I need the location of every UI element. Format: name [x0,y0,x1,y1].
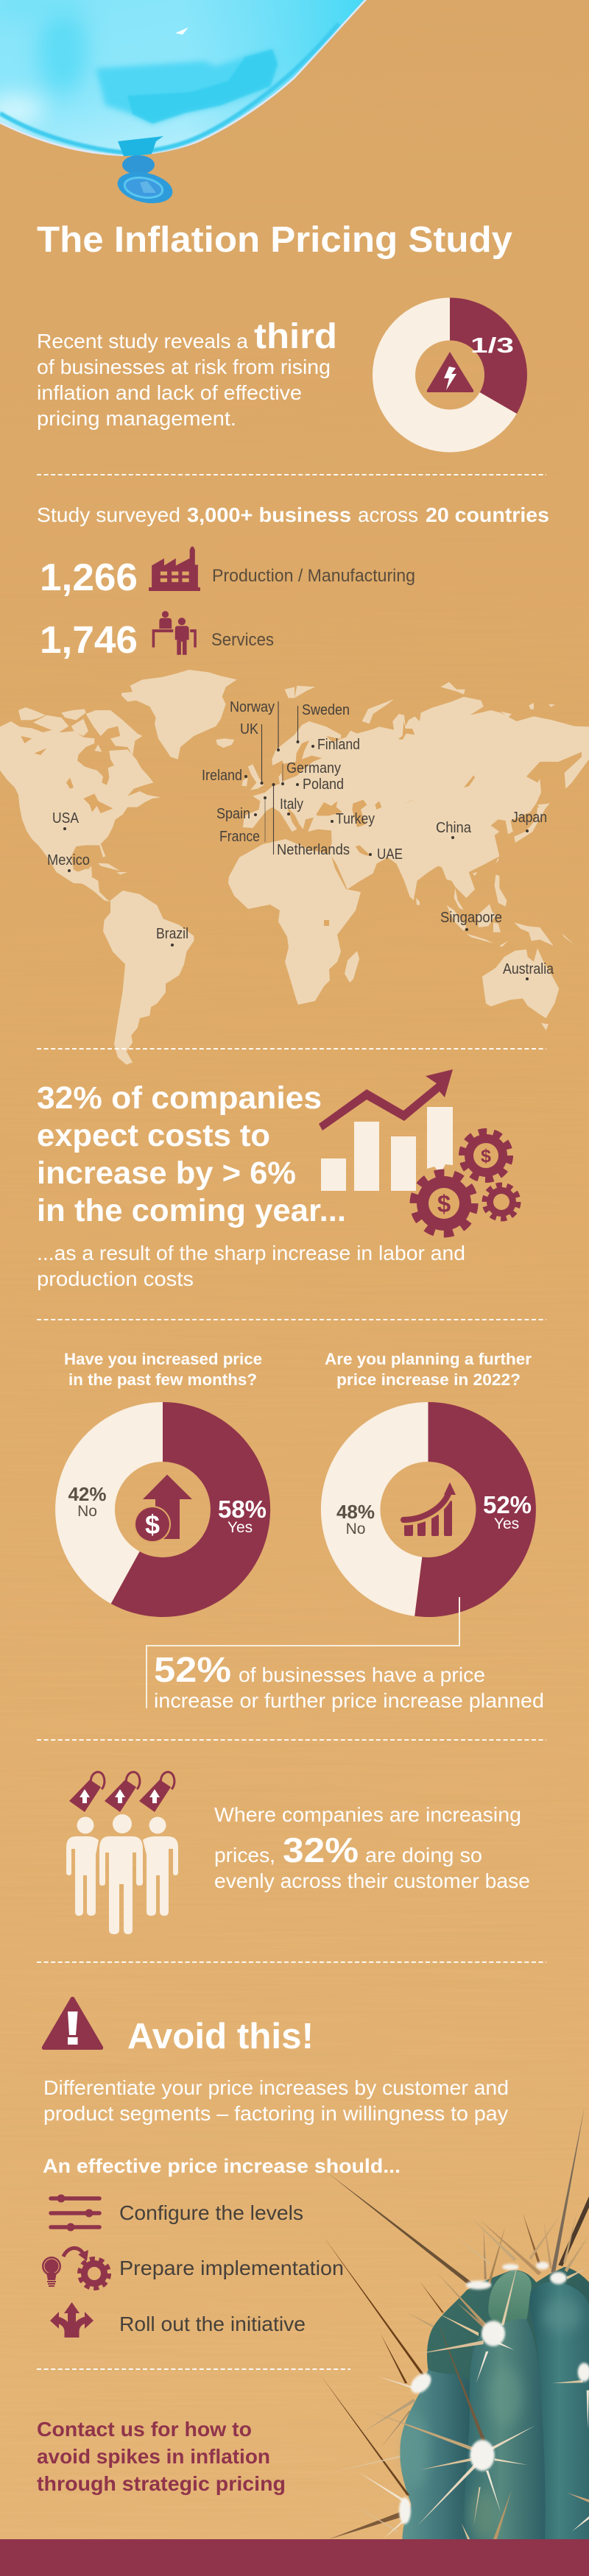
map: country labels and markers: Brazil [156,926,188,942]
step: roll out the initiative: Roll out the initiative [119,2313,306,2335]
survey heading: Study surveyed [37,503,180,526]
stat: production: Production / Manufacturing [212,566,415,586]
map: country labels and markers: Japan [512,810,547,826]
step: configure the levels: Configure the levels [119,2201,303,2224]
survey heading: 20 countries [426,503,549,526]
avoid heading with warning icon: Avoid this! [127,2017,314,2056]
stat: services: Services [211,630,274,650]
panel: further price increase planned: Are you planning a further [325,1350,532,1368]
map: country labels and markers: UAE [377,846,403,863]
gear small [484,1185,518,1219]
panel: further price increase planned: price increase in 2022? [336,1370,521,1389]
avoid heading with warning icon [42,1997,314,2056]
cactus areoles [399,2262,589,2524]
intro text block: third [254,317,337,356]
map: country labels and markers: Norway [230,699,275,715]
world map [0,670,589,1065]
map: Southeast Asia and Australia [416,857,574,1030]
map: country labels and markers: Germany [286,760,341,776]
survey heading: 3,000+ business [187,503,351,526]
cactus photo illustration [321,2106,589,2540]
call to action: through strategic pricing [37,2472,286,2495]
intro text block: inflation and lack of effective [37,381,302,404]
subheading: An effective price increase should... [43,2155,401,2177]
customer base text: are doing so [365,1844,482,1866]
map: Central and South America [74,868,194,1065]
icon: rising curve over bars [403,1482,456,1536]
price tag [105,1772,140,1812]
call to action [37,2418,286,2495]
avoid description: product segments – factoring in willingness to pay [43,2102,508,2125]
stat: production: 1,266 [40,556,138,599]
icon: factory [149,546,200,591]
icon: service desk people [152,611,197,655]
panel: price increase past months: Have you increased price [64,1350,262,1368]
costs subtext [37,1242,465,1290]
avoid description: Differentiate your price increases by customer and [43,2076,509,2099]
map: country labels and markers: Spain [216,806,250,822]
donut chart: 58 yes 42 no: Yes [228,1519,253,1536]
step: roll out the initiative [50,2302,306,2338]
survey heading [37,503,549,526]
cactus spines light [333,2213,589,2539]
gear medium: $ [481,1146,491,1167]
map: country labels and markers: Turkey [336,811,375,827]
balloon illustration [0,0,375,208]
map: country labels and markers: China [436,820,472,836]
icon: sliders [51,2195,99,2232]
survey heading: across [358,503,418,526]
map: country labels and markers: Italy [280,796,303,813]
gear medium [462,1132,509,1179]
map: country labels and markers: Sweden [302,702,350,718]
price tag [139,1772,174,1812]
callout: 52 percent [147,1597,544,1712]
map: country labels and markers: Poland [303,776,344,793]
customer base text: prices, [214,1844,275,1866]
map: country labels and markers: Australia [503,961,554,977]
donut chart: 58 yes 42 no [55,1402,270,1617]
gear large [414,1173,474,1234]
stat: production [40,546,415,599]
costs heading: expect costs to [37,1118,270,1153]
donut chart: 58 yes 42 no: 42% [68,1483,107,1505]
divider [37,1739,546,1741]
people figures [66,1814,178,1934]
donut chart: one third: 1/3 [470,334,514,358]
icon: dollar coin with up arrow: $ [145,1510,160,1540]
stat: services: 1,746 [40,619,138,662]
panel: price increase past months [55,1350,270,1617]
divider [37,2368,350,2370]
avoid description [43,2076,509,2125]
stat: services [40,611,274,662]
costs heading [37,1080,346,1228]
panel: price increase past months: in the past few months? [68,1370,257,1389]
customer base text: 32% [283,1830,359,1869]
divider [37,1048,546,1050]
call to action: Contact us for how to [37,2418,252,2441]
donut chart: 52 yes 48 no: 52% [483,1491,532,1518]
cactus spines dark [321,2106,589,2539]
panel: further price increase planned [321,1350,536,1617]
map: Eurasia [243,682,589,900]
map: Greenland [121,670,237,760]
map: country labels and markers: Singapore [440,910,502,926]
icon: branching arrows [50,2302,94,2338]
map: country labels and markers: USA [52,810,80,827]
map: country labels and markers: Finland [317,737,360,753]
costs heading: in the coming year... [37,1193,346,1228]
icon: rising bar chart with gears [319,1069,518,1234]
map: country labels and markers: Mexico [47,852,90,868]
donut chart: 58 yes 42 no: 58% [218,1496,267,1523]
costs subtext: ...as a result of the sharp increase in labor and [37,1242,465,1264]
map: country labels and markers: Netherlands [277,842,350,858]
map: country labels and markers [47,699,554,980]
donut chart: 58 yes 42 no: No [77,1503,97,1520]
step: prepare implementation: Prepare implementation [119,2257,344,2279]
icon: warning triangle [42,1997,103,2050]
map: Iceland and UK [216,738,234,748]
step: prepare implementation [42,2248,344,2288]
icon: customers with price tags [66,1772,178,1934]
call to action: avoid spikes in inflation [37,2445,270,2468]
icon: bulb and gear [42,2248,109,2288]
customer base text: evenly across their customer base [214,1869,530,1892]
intro text block [37,317,337,430]
divider [37,474,546,475]
divider [37,1319,546,1320]
divider [37,1961,546,1963]
costs heading: 32% of companies [37,1080,322,1116]
footer bar [0,2539,589,2576]
costs heading: increase by > 6% [37,1156,296,1191]
callout: 52 percent: 52% [154,1651,231,1690]
donut chart: 52 yes 48 no [321,1402,536,1617]
gear large: $ [437,1190,451,1217]
donut chart: one third [373,297,527,453]
intro text block: Recent study reveals a [37,330,248,353]
donut chart: 52 yes 48 no: Yes [494,1515,519,1532]
price tag [69,1772,105,1812]
map: country labels and markers: France [219,829,260,845]
callout: 52 percent: increase or further price increase planned [154,1689,544,1712]
step: configure the levels [51,2195,303,2232]
map: Caribbean [98,863,120,871]
customer base text [214,1803,530,1892]
map: country labels and markers: UK [240,721,259,737]
intro text block: pricing management. [37,407,236,430]
map: Africa [228,839,361,1005]
title: The Inflation Pricing Study [37,220,512,260]
map: Americas north [0,670,264,885]
donut chart: 52 yes 48 no: 48% [336,1501,375,1523]
map: country labels and markers: Ireland [202,768,242,784]
costs subtext: production costs [37,1267,194,1290]
intro text block: of businesses at risk from rising [37,355,331,378]
icon: warning bolt [427,352,473,392]
balloon knot [115,155,175,208]
callout: 52 percent: of businesses have a price [239,1663,485,1686]
cactus body [400,2267,589,2540]
donut chart: 52 yes 48 no: No [346,1521,365,1538]
customer base text: Where companies are increasing [214,1803,521,1826]
icon: dollar coin with up arrow [134,1475,192,1543]
